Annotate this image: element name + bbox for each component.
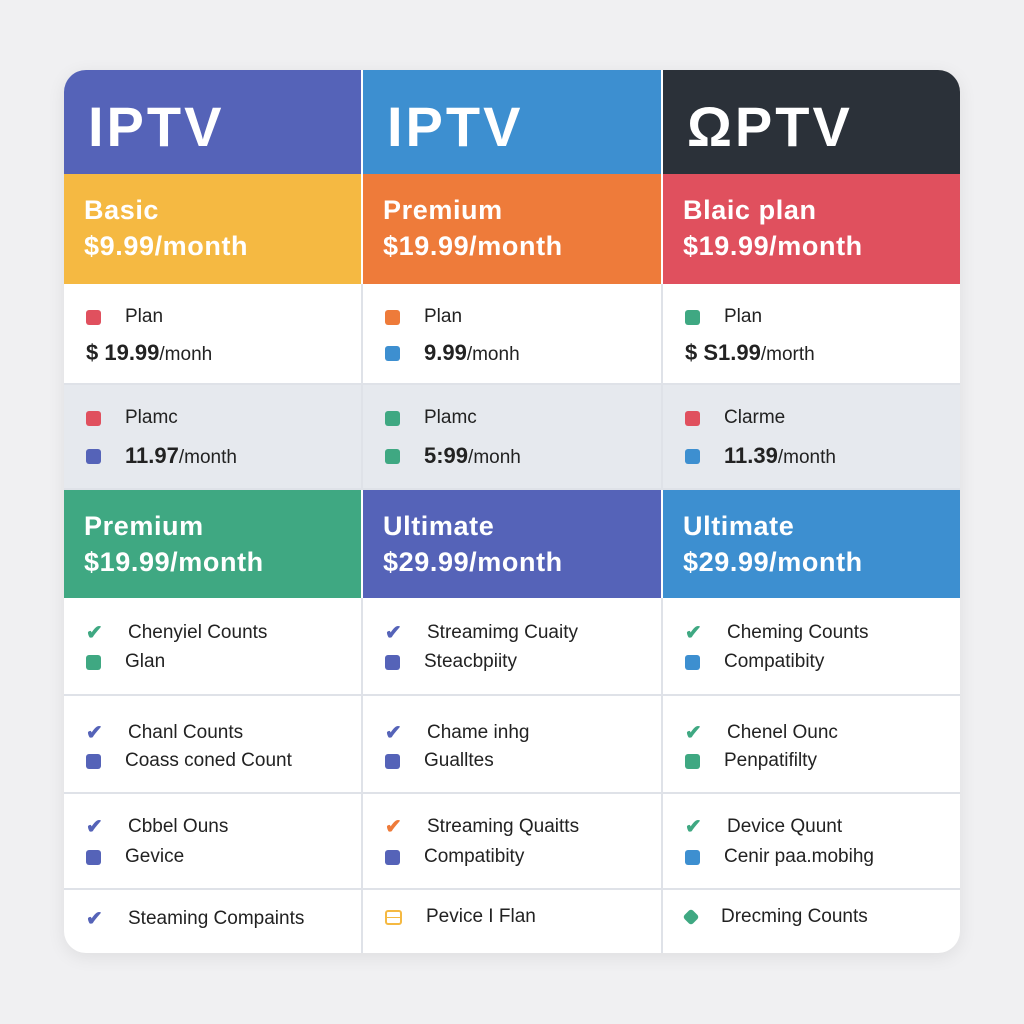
price: blaic plan: Blaic plan [683, 195, 817, 225]
price: premium green: $19.99/month [84, 547, 264, 577]
price: premium green [64, 490, 361, 598]
feature row C col 3: Device Quunt [727, 816, 842, 836]
row 2 col 2 (gray): Plamc [424, 407, 477, 428]
row 1 col 3 [663, 284, 960, 385]
feature row C col 2: Compatibity [424, 846, 524, 867]
feature row A col 3 [663, 598, 960, 696]
row 1 col 3: Plan [724, 306, 762, 327]
price: blaic plan: $19.99/month [683, 231, 863, 261]
price: ultimate indigo: $29.99/month [383, 547, 563, 577]
feature row A col 2: Steacbpiity [424, 651, 517, 672]
price: basic: Basic [84, 195, 159, 225]
header: IPTV column 1: IPTV [88, 95, 224, 158]
header: IPTV column 3 [663, 70, 960, 174]
feature row B col 2: ✔ [385, 722, 402, 744]
feature row A col 2: Streamimg Cuaity [427, 622, 578, 642]
feature row B col 1: ✔ [86, 722, 103, 744]
feature row A col 2 [363, 598, 663, 696]
row 1 col 2: Plan [424, 306, 462, 327]
feature row A col 1 [64, 598, 363, 696]
price: ultimate blue: $29.99/month [683, 547, 863, 577]
row 1 col 1: $ 19.99/monh [86, 340, 212, 365]
feature row C col 3: Cenir paa.mobihg [724, 846, 874, 867]
price: ultimate blue: Ultimate [683, 511, 794, 541]
feature row C col 3: ✔ [685, 816, 702, 838]
feature row B col 2: Chame inhg [427, 722, 529, 742]
feature row C col 3 [663, 794, 960, 890]
row 2 col 2 (gray): 5:99/monh [424, 443, 521, 468]
feature row A col 1: Chenyiel Counts [128, 622, 267, 642]
header: IPTV column 3: ΩPTV [687, 95, 853, 158]
feature row B col 1: Chanl Counts [128, 722, 243, 742]
feature row C col 2 [363, 794, 663, 890]
price: ultimate blue [663, 490, 960, 598]
price: blaic plan [663, 174, 960, 284]
feature row C col 1 [64, 794, 363, 890]
pricing table card [64, 70, 960, 953]
feature row B col 2 [363, 696, 663, 794]
row 1 col 1 [64, 284, 363, 385]
price: premium: $19.99/month [383, 231, 563, 261]
row 2 col 3 (gray) [663, 385, 960, 490]
feature row B col 3 [663, 696, 960, 794]
row 2 col 3 (gray): Clarme [724, 407, 785, 428]
footer row col 2: Pevice I Flan [426, 906, 536, 927]
feature row B col 3: Chenel Ounc [727, 722, 838, 742]
feature row B col 1 [64, 696, 363, 794]
row 2 col 3 (gray): 11.39/month [724, 443, 836, 468]
footer row col 1: ✔ [86, 908, 103, 930]
row 2 col 1 (gray): Plamc [125, 407, 178, 428]
row 1 col 3: $ S1.99/morth [685, 340, 815, 365]
feature row A col 3: Cheming Counts [727, 622, 869, 642]
feature row A col 1: Glan [125, 651, 165, 672]
feature row C col 1: Cbbel Ouns [128, 816, 228, 836]
price: premium: Premium [383, 195, 503, 225]
feature row A col 2: ✔ [385, 622, 402, 644]
feature row A col 3: Compatibity [724, 651, 824, 672]
feature row A col 3: ✔ [685, 622, 702, 644]
price: basic: $9.99/month [84, 231, 248, 261]
feature row C col 2: ✔ [385, 816, 402, 838]
header: IPTV column 1 [64, 70, 361, 174]
header: IPTV column 2: IPTV [387, 95, 523, 158]
header: IPTV column 2 [363, 70, 661, 174]
feature row B col 2: Gualltes [424, 750, 494, 771]
row 1 col 2 [363, 284, 663, 385]
footer row col 1 [64, 890, 363, 953]
feature row B col 3: ✔ [685, 722, 702, 744]
feature row C col 2: Streaming Quaitts [427, 816, 579, 836]
feature row A col 1: ✔ [86, 622, 103, 644]
footer row col 2 [363, 890, 663, 953]
row 1 col 1: Plan [125, 306, 163, 327]
price: premium [363, 174, 661, 284]
row 2 col 1 (gray): 11.97/month [125, 443, 237, 468]
feature row C col 1: ✔ [86, 816, 103, 838]
price: basic [64, 174, 361, 284]
row 1 col 2: 9.99/monh [424, 340, 520, 365]
price: premium green: Premium [84, 511, 204, 541]
row 2 col 1 (gray) [64, 385, 363, 490]
footer row col 1: Steaming Compaints [128, 908, 304, 928]
feature row C col 1: Gevice [125, 846, 184, 867]
feature row B col 3: Penpatifilty [724, 750, 817, 771]
footer row col 3: Drecming Counts [721, 906, 868, 927]
price: ultimate indigo: Ultimate [383, 511, 494, 541]
row 2 col 2 (gray) [363, 385, 663, 490]
feature row B col 1: Coass coned Count [125, 750, 292, 771]
price: ultimate indigo [363, 490, 661, 598]
